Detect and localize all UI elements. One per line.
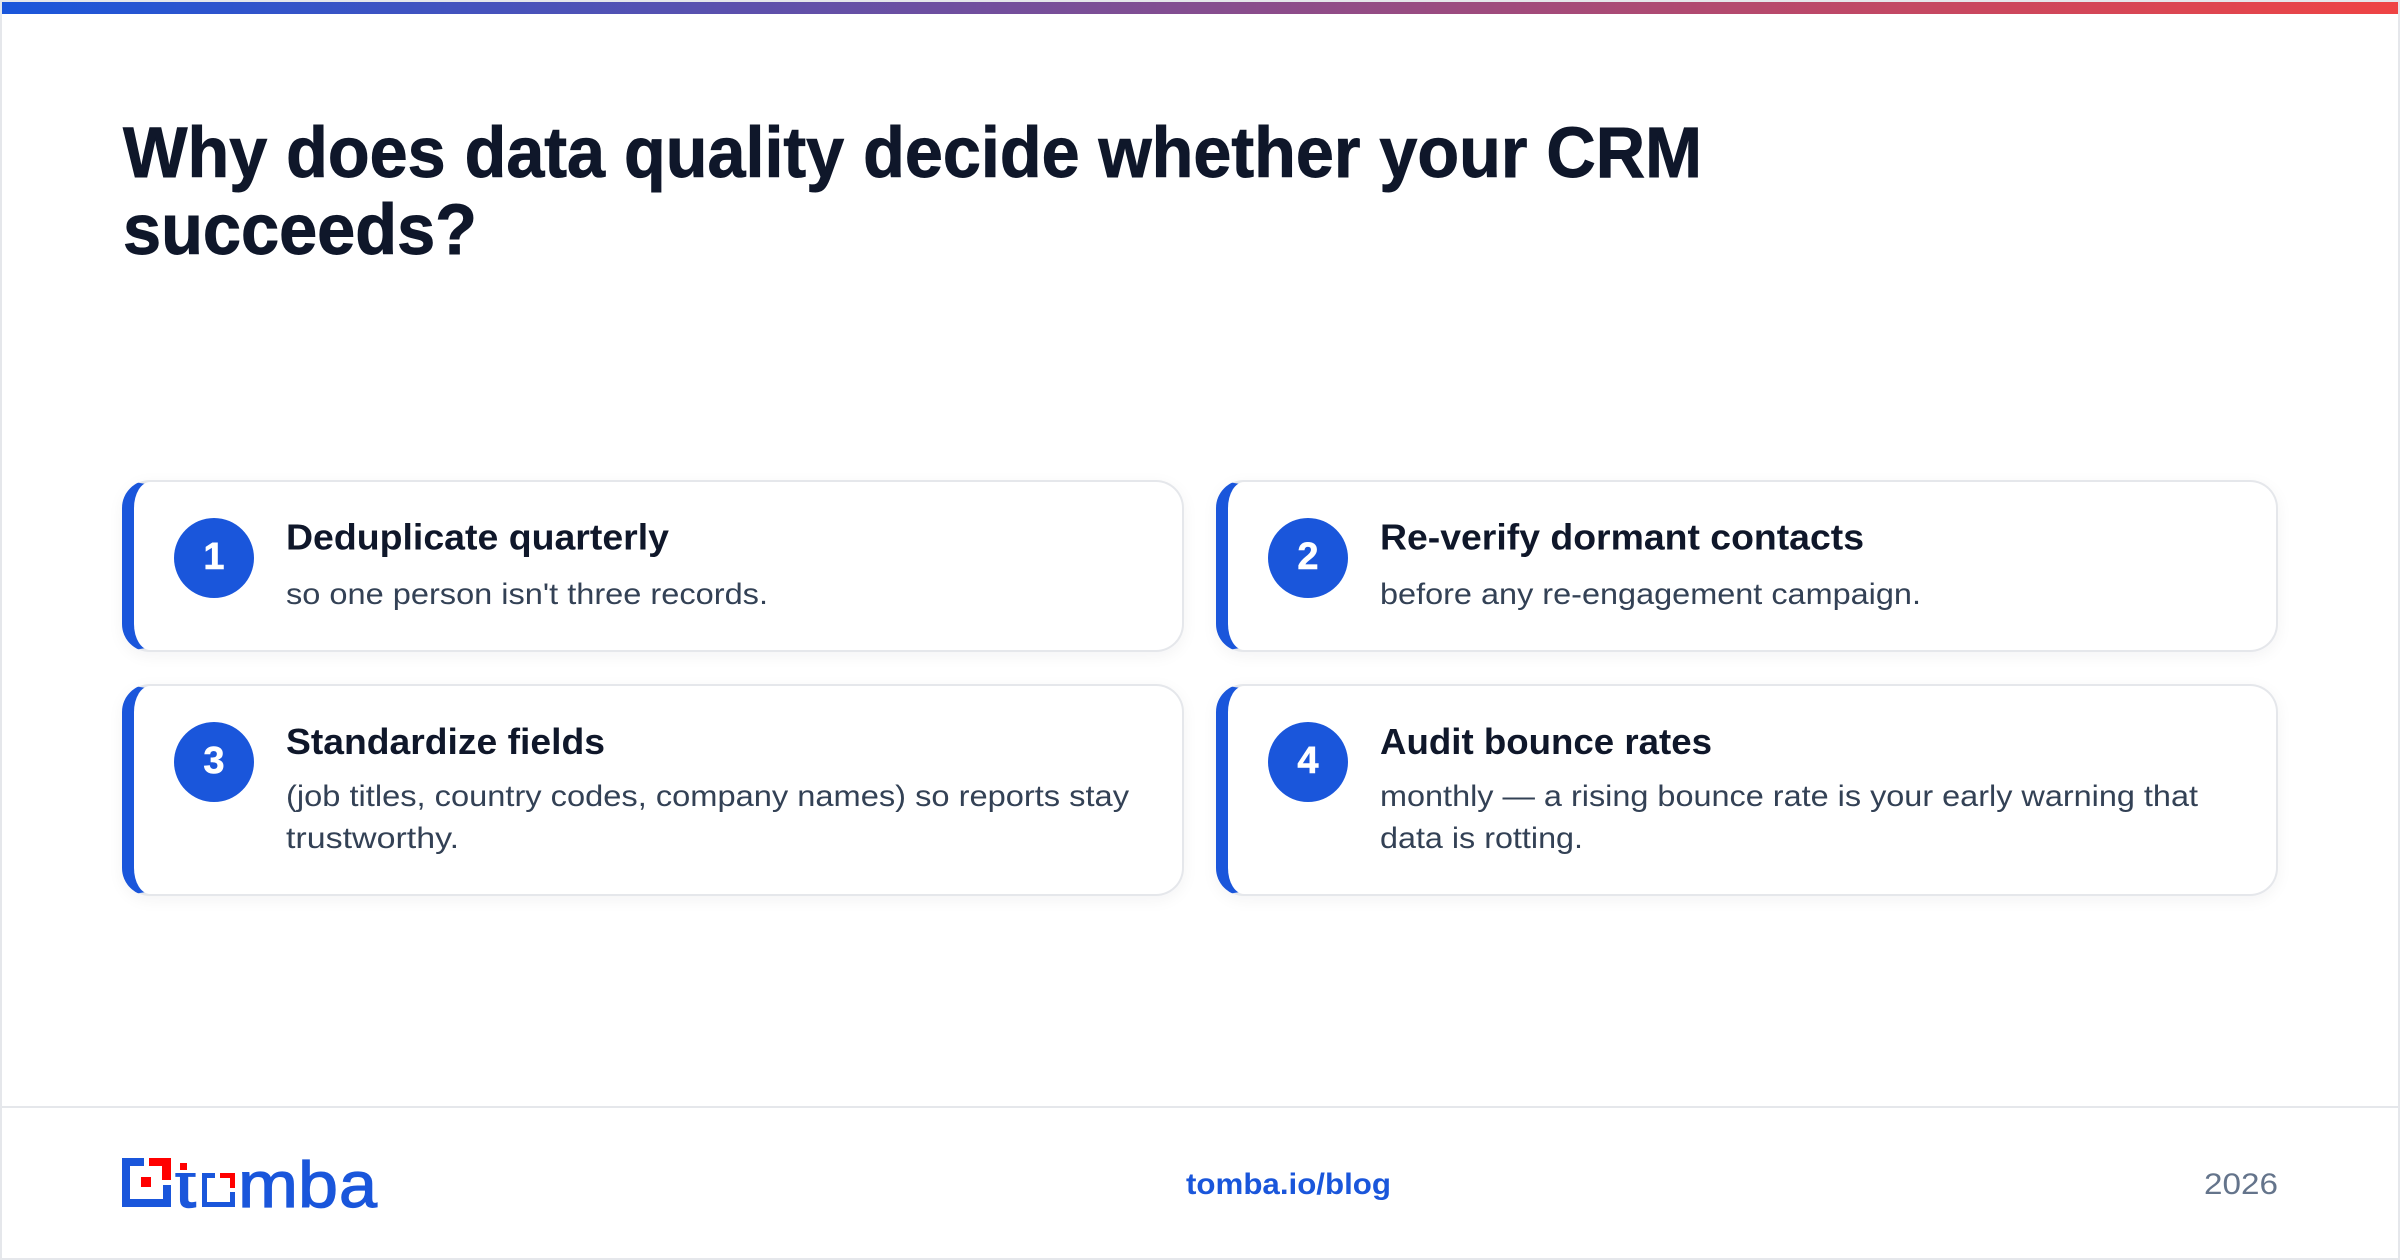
text: card 3: [286, 721, 1129, 855]
top gradient bar: [2, 2, 2398, 14]
title: [122, 120, 1702, 270]
text: card 4: data is rotting.: [1380, 822, 1583, 855]
text: card 4: [1380, 721, 2199, 855]
text: card 2: before any re-engagement campaign.: [1380, 578, 1921, 611]
text: card 3: trustworthy.: [286, 822, 459, 855]
title: succeeds?: [123, 191, 477, 270]
number badge 1: 1: [203, 536, 225, 578]
number badge 3: 3: [203, 740, 225, 782]
number badge 4: 4: [1297, 740, 1319, 782]
footer link: tomba.io/blog: [1186, 1168, 1391, 1201]
panel: card 2 re-verify: [1216, 480, 2278, 652]
panel: card 3 standardize: [122, 684, 1184, 896]
text: card 2: Re-verify dormant contacts: [1380, 516, 1864, 558]
panel: card 4 audit: [1216, 684, 2278, 896]
text: card 1: Deduplicate quarterly: [286, 516, 669, 558]
logo wordmark: [175, 1159, 378, 1208]
number badge 2: 2: [1297, 536, 1319, 578]
panel: card 1 deduplicate: [122, 480, 1184, 652]
number badge 2: [1268, 518, 1348, 598]
footer year: 2026: [2204, 1168, 2278, 1201]
number badge 1: [174, 518, 254, 598]
logo: tomba: [122, 1150, 378, 1214]
number badge 4: [1268, 722, 1348, 802]
text: card 2: [1380, 516, 1921, 611]
icon: logo mark: [122, 1158, 171, 1207]
number badge 3: [174, 722, 254, 802]
text: card 3: Standardize fields: [286, 721, 605, 762]
text: card 3: (job titles, country codes, company names) so reports stay: [286, 780, 1129, 813]
text: card 4: monthly — a rising bounce rate is your early warning that: [1380, 780, 2199, 813]
footer divider: [2, 1106, 2398, 1108]
text: card 1: so one person isn't three records.: [286, 578, 768, 611]
text: card 4: Audit bounce rates: [1380, 721, 1712, 762]
text: card 1: [286, 516, 768, 611]
